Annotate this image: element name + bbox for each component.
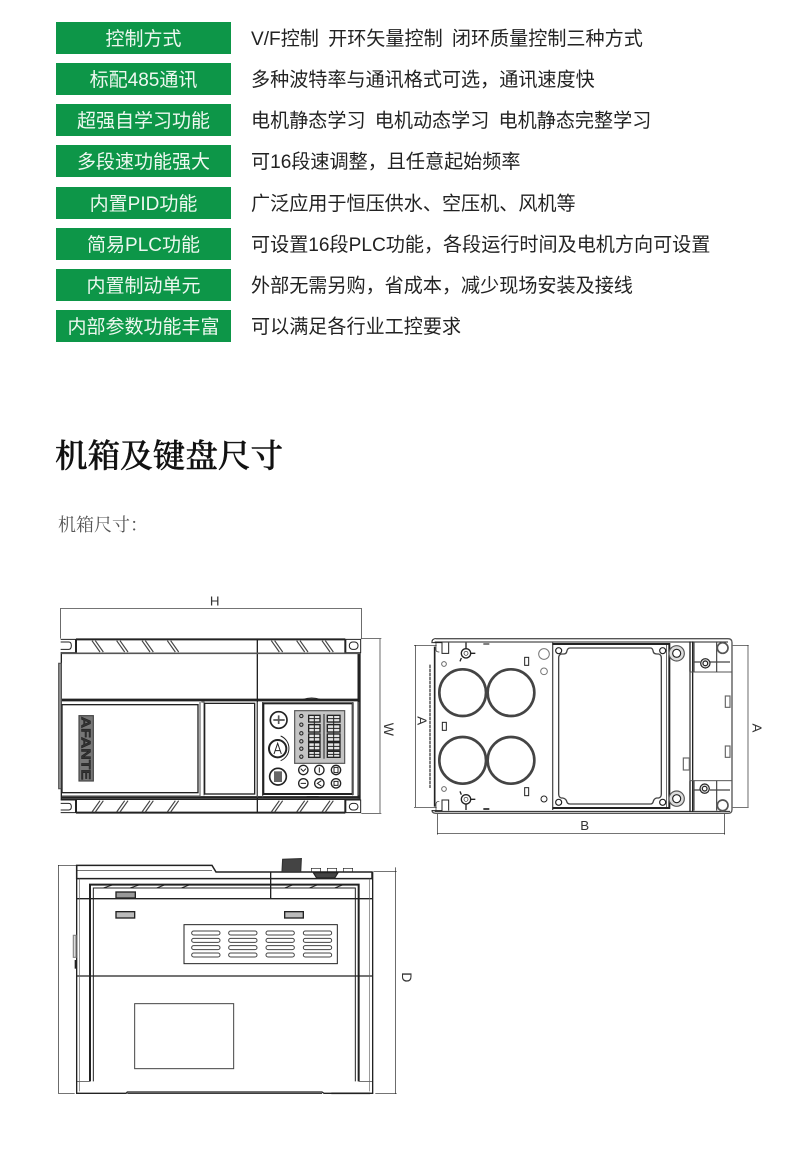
row: 超强自学习功能: 超强自学习功能 bbox=[77, 111, 210, 132]
row: 简易PLC功能: 可设置16段PLC功能，各段运行时间及电机方向可设置 bbox=[251, 235, 710, 256]
mounting ears bbox=[61, 639, 361, 813]
middle panel bbox=[205, 702, 263, 797]
dimension D bbox=[373, 867, 415, 1094]
display window bbox=[295, 711, 345, 763]
row: 多段速功能强大: 可16段速调整，且任意起始频率 bbox=[251, 152, 520, 173]
diagram: side view of housing bbox=[58, 859, 415, 1094]
large screw bosses bbox=[669, 642, 689, 811]
row: 内置制动单元 bbox=[56, 269, 633, 301]
outer frame bbox=[430, 639, 732, 813]
row: 控制方式 bbox=[56, 22, 643, 54]
heading: 机箱及键盘尺寸: 机箱及键盘尺寸 bbox=[55, 439, 283, 475]
top profile with keypad protrusions bbox=[77, 859, 372, 899]
row: 控制方式: V/F控制 开环矢量控制 闭环质量控制三种方式 bbox=[251, 29, 643, 50]
top vent strip bbox=[76, 639, 345, 653]
keypad panel bbox=[263, 702, 359, 795]
row: 内部参数功能丰富: 可以满足各行业工控要求 bbox=[251, 317, 461, 338]
row: 内置PID功能 bbox=[56, 187, 576, 219]
body outline bbox=[59, 639, 360, 813]
outer body walls bbox=[73, 865, 373, 1093]
row: 内置制动单元: 内置制动单元 bbox=[86, 276, 200, 297]
dimension A left: A bbox=[414, 716, 429, 725]
small holes and slots bbox=[442, 644, 549, 809]
dimension W: W bbox=[381, 723, 397, 737]
dimension left bbox=[58, 865, 76, 1093]
diagram: rear view of housing bbox=[414, 639, 765, 835]
screw posts bbox=[460, 643, 475, 810]
inner body frame bbox=[76, 885, 373, 1081]
dimension D: D bbox=[399, 972, 415, 982]
dimension W bbox=[361, 639, 397, 813]
dimension A right: A bbox=[750, 724, 765, 733]
conduit knockouts bbox=[439, 669, 534, 784]
row: 内置PID功能: 广泛应用于恒压供水、空压机、风机等 bbox=[251, 194, 576, 215]
dimension B: B bbox=[580, 818, 589, 833]
cover panel with AFANTE logo bbox=[62, 702, 204, 796]
label rectangle bbox=[135, 1004, 234, 1069]
central terminal plate bbox=[553, 643, 669, 810]
row: 内置制动单元: 外部无需另购，省成本，减少现场安装及接线 bbox=[251, 276, 633, 297]
row: 简易PLC功能: 简易PLC功能 bbox=[87, 235, 200, 256]
dimension H: H bbox=[210, 593, 219, 608]
ventilation panel bbox=[184, 925, 337, 964]
small keys bbox=[299, 765, 341, 788]
row: 超强自学习功能: 电机静态学习 电机动态学习 电机静态完整学习 bbox=[251, 111, 651, 132]
row: 内置PID功能: 内置PID功能 bbox=[90, 194, 197, 215]
stop button bbox=[270, 768, 286, 785]
diagram: front view of housing bbox=[59, 593, 397, 813]
rotary knob bbox=[269, 736, 289, 761]
row: 控制方式: 控制方式 bbox=[105, 29, 182, 50]
row: 内部参数功能丰富 bbox=[56, 310, 461, 342]
row: 内部参数功能丰富: 内部参数功能丰富 bbox=[67, 317, 220, 338]
row: 标配485通讯: 标配485通讯 bbox=[90, 70, 197, 91]
slots bbox=[116, 892, 303, 918]
dimension A left bbox=[414, 645, 437, 807]
row: 多段速功能强大: 多段速功能强大 bbox=[77, 152, 210, 173]
run button bbox=[270, 712, 287, 728]
row: 多段速功能强大 bbox=[56, 145, 520, 177]
dimension A right bbox=[733, 645, 765, 807]
row: 简易PLC功能 bbox=[56, 228, 710, 260]
row: 标配485通讯: 多种波特率与通讯格式可选，通讯速度快 bbox=[251, 70, 595, 91]
row: 超强自学习功能 bbox=[56, 104, 651, 136]
left corner details bbox=[431, 643, 449, 811]
bottom vent strip bbox=[76, 800, 345, 813]
dimension H bbox=[61, 593, 361, 639]
row: 标配485通讯 bbox=[56, 63, 595, 95]
dimension B bbox=[437, 813, 725, 835]
right side bracket bbox=[683, 641, 732, 812]
subheading: 机箱尺寸: 机箱尺寸： bbox=[58, 515, 148, 535]
cover panel with AFANTE logo: AFANTE bbox=[79, 717, 94, 780]
